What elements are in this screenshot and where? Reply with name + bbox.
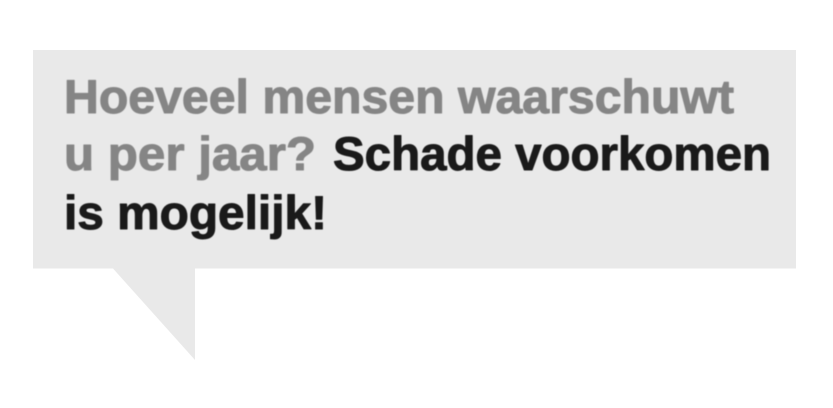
panel: speech bubble with tail [33, 50, 796, 360]
text: grey question line 1: Hoeveel mensen waarschuwt [64, 70, 734, 123]
text: grey question line 2: u per jaar? [64, 127, 316, 180]
text: black statement line 2: is mogelijk! [64, 186, 327, 239]
heading: question and statement [64, 70, 771, 239]
text: black statement line 1: Schade voorkomen [333, 127, 771, 180]
